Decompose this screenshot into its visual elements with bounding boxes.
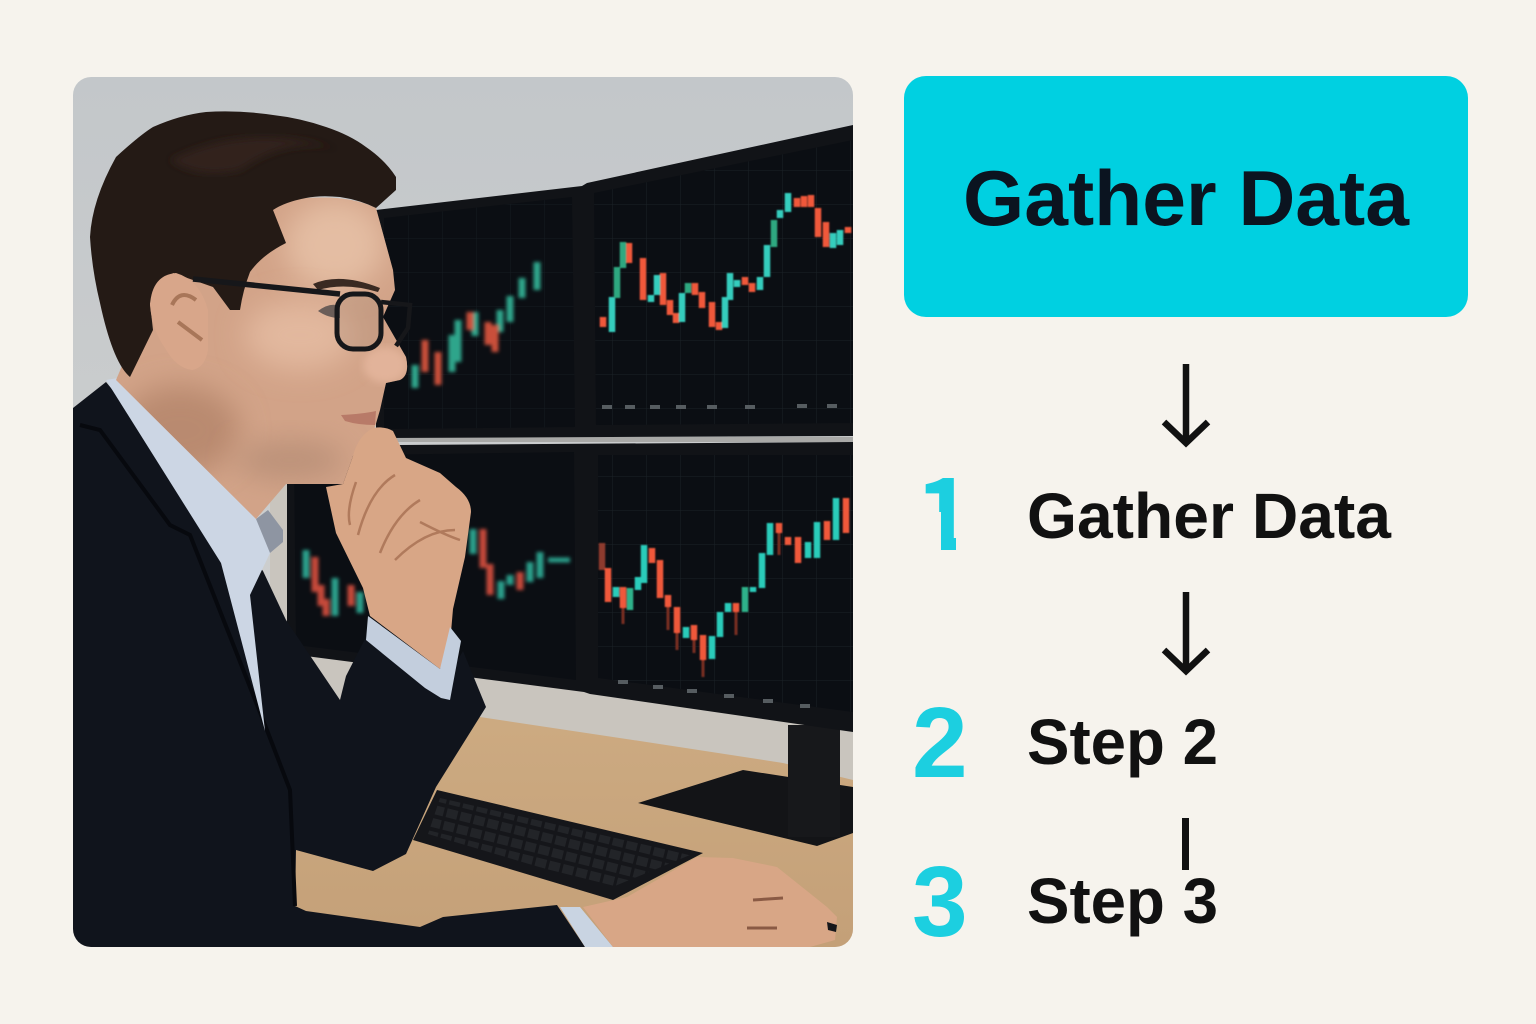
monitor: upper left	[384, 197, 575, 429]
monitor stand	[638, 725, 853, 846]
hair	[90, 111, 396, 377]
axis ticks	[602, 406, 837, 407]
wall below monitors	[270, 480, 853, 800]
title box	[904, 76, 1468, 317]
label 1: Gather Data	[1027, 480, 1391, 552]
mouse	[827, 922, 837, 932]
eyebrow and eye	[313, 279, 380, 292]
label 3: Step 3	[1027, 865, 1218, 937]
step 3	[912, 846, 1218, 958]
monitor: lower right	[598, 455, 853, 712]
ear	[150, 273, 192, 370]
arrow: title to step 1	[1164, 364, 1208, 443]
monitor backing: lower row	[287, 442, 853, 732]
number 2: 2	[912, 687, 968, 799]
shirt collar and placket	[106, 378, 283, 731]
label 2: Step 2	[1027, 706, 1218, 778]
candlesticks	[603, 193, 848, 332]
number 1: 1	[915, 434, 974, 579]
divider between monitor rows	[376, 437, 853, 442]
number 3: 3	[912, 846, 968, 958]
glasses	[193, 279, 410, 349]
jacket	[73, 382, 585, 947]
resting hand	[560, 857, 837, 947]
man	[73, 111, 837, 947]
step 2	[912, 687, 1218, 799]
monitor: lower left	[300, 526, 572, 618]
wall	[73, 77, 853, 947]
photo: analyst studying trading charts	[73, 77, 853, 947]
candlesticks	[602, 498, 846, 677]
arrow: step 1 to step 2	[1164, 592, 1208, 671]
neck and face	[116, 197, 407, 519]
desk	[290, 700, 853, 947]
jacket lapel	[80, 425, 295, 906]
thinking hand	[326, 427, 471, 669]
connector line: step 2 to step 3	[1182, 818, 1189, 870]
step 1	[926, 478, 1392, 550]
monitor backing: upper row	[376, 125, 853, 438]
axis ticks	[618, 682, 810, 706]
keyboard	[413, 790, 703, 900]
hair highlight	[176, 138, 300, 172]
lips	[341, 411, 376, 425]
monitor: upper right	[594, 140, 853, 425]
shirt cuff	[366, 616, 461, 700]
title text: Gather Data	[963, 154, 1410, 242]
finger creases	[349, 475, 460, 560]
